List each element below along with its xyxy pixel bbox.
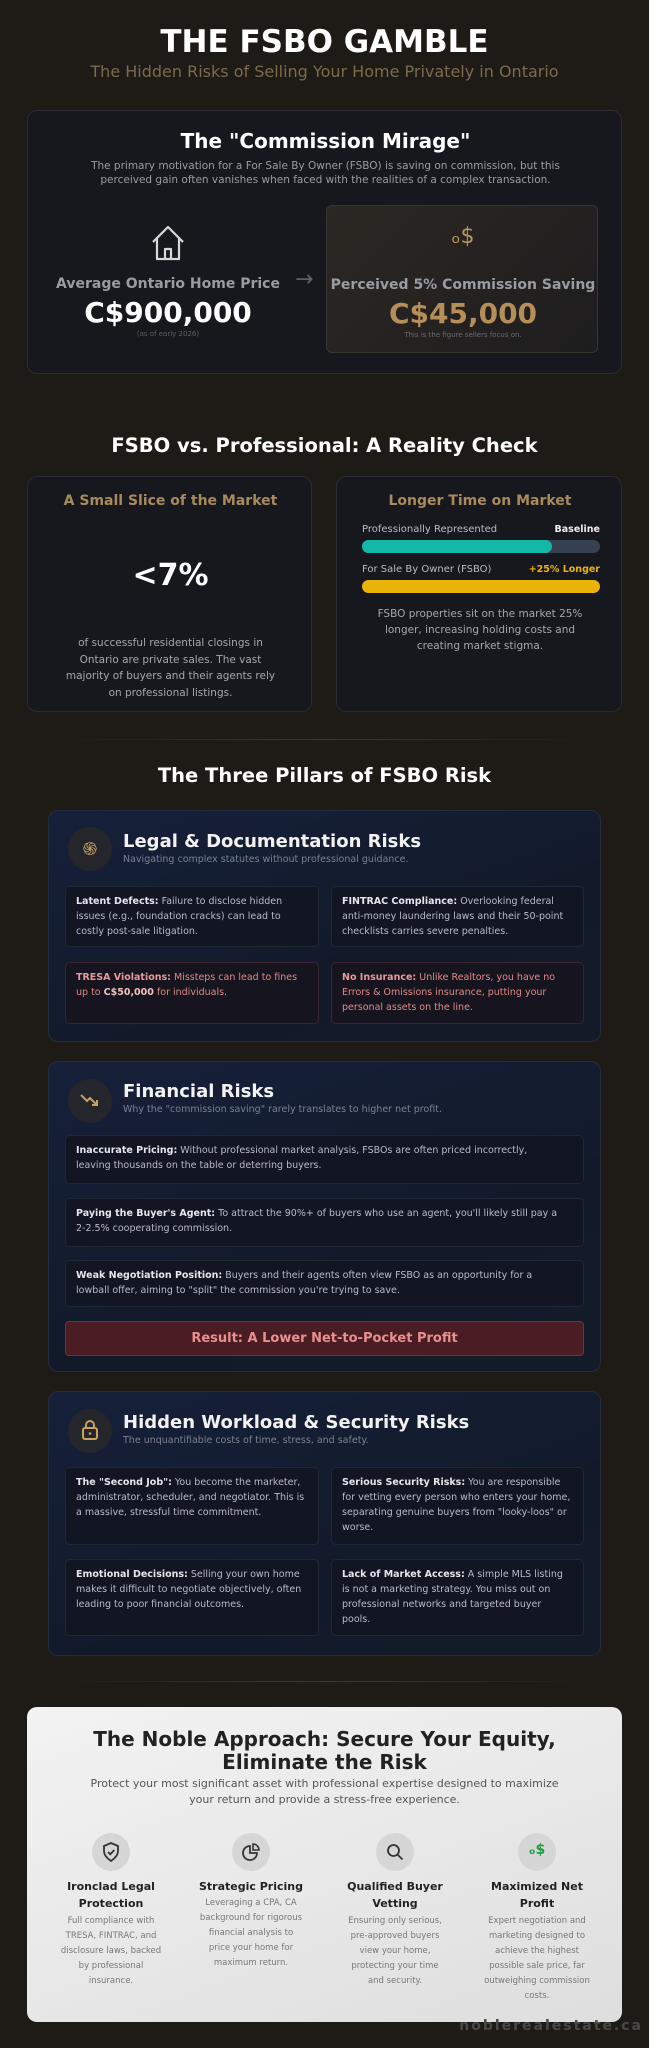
- feature: legal protection: disclosure laws, backed: [61, 1946, 161, 1956]
- feature: net profit: [484, 1833, 590, 2001]
- bar chart: +25% Longer: [529, 564, 600, 575]
- description: [91, 160, 560, 186]
- icon: coins: ₒ$: [451, 224, 475, 249]
- title: THE FSBO GAMBLE: [160, 24, 489, 60]
- panel: time on market: FSBO properties sit on the market 25%: [378, 608, 582, 620]
- box: buyer's agent: Paying the Buyer's Agent: To attract the 90%+ of buyers who use an agent, you'll likely still pay a: [76, 1208, 557, 1219]
- feature: legal protection: Ironclad Legal: [67, 1880, 155, 1893]
- stat: average price: [56, 226, 280, 338]
- box: security: [331, 1467, 584, 1545]
- box: buyer's agent: [65, 1198, 584, 1247]
- feature: buyer vetting: and security.: [368, 1976, 422, 1986]
- panel: financial risks: [48, 1061, 601, 1372]
- subtitle: The Hidden Risks of Selling Your Home Privately in Ontario: [90, 62, 559, 81]
- feature: buyer vetting: protecting your time: [351, 1961, 439, 1971]
- box: market access: pools.: [342, 1614, 370, 1625]
- feature: pricing: maximum return.: [214, 1958, 288, 1968]
- panel: small slice: A Small Slice of the Market: [64, 493, 277, 509]
- box: second job: a massive, stressful time commitment.: [76, 1507, 261, 1518]
- feature: net profit: costs.: [525, 1991, 549, 2001]
- bar chart: Professionally Represented: [362, 524, 497, 535]
- box: pricing: [65, 1135, 584, 1184]
- stat: commission saving: C$45,000: [389, 297, 537, 330]
- callout: result: [65, 1321, 584, 1356]
- box: TRESA: up to C$50,000 for individuals.: [76, 987, 227, 998]
- panel: time on market: longer, increasing holding costs and: [385, 624, 575, 636]
- box: pricing: leaving thousands on the table or deterring buyers.: [76, 1160, 321, 1171]
- stat: average price: C$900,000: [84, 296, 252, 329]
- stat: average price: (as of early 2026): [137, 330, 199, 338]
- icon: trend down: [68, 1079, 112, 1123]
- heading: Legal & Documentation Risks: [123, 831, 421, 852]
- panel: financial risks: Financial Risks: [123, 1081, 274, 1102]
- box: insurance: personal assets on the line.: [342, 1002, 473, 1013]
- panel: workload risks: [48, 1391, 601, 1656]
- feature: net profit: possible sale price, far: [489, 1961, 585, 1971]
- box: FINTRAC: checklists carries severe penalties.: [342, 926, 508, 937]
- feature: buyer vetting: [347, 1833, 443, 1986]
- box: buyer's agent: 2-2.5% cooperating commission.: [76, 1223, 232, 1234]
- panel: small slice: majority of buyers and their agents rely: [66, 670, 275, 682]
- box: second job: administrator, scheduler, and negotiator. This is: [76, 1492, 304, 1503]
- panel: small slice: Ontario are private sales. The vast: [80, 654, 261, 666]
- feature: buyer vetting: Vetting: [372, 1897, 418, 1910]
- box: latent defects: issues (e.g., foundation cracks) can lead to: [76, 911, 281, 922]
- heading: [93, 1727, 556, 1774]
- box: TRESA: TRESA Violations: Missteps can lead to fines: [76, 972, 297, 983]
- box: negotiation: lowball offer, aiming to "split" the commission you're trying to save.: [76, 1285, 400, 1296]
- panel: financial risks: Why the "commission saving" rarely translates to higher net profit.: [123, 1104, 442, 1115]
- description: [90, 1777, 558, 1806]
- feature: legal protection: by professional: [79, 1961, 143, 1971]
- panel: workload risks: The unquantifiable costs of time, stress, and safety.: [123, 1435, 369, 1446]
- stat: average price: Average Ontario Home Price: [56, 276, 280, 292]
- feature: buyer vetting: view your home,: [360, 1946, 430, 1956]
- box: second job: [65, 1467, 319, 1545]
- panel: time on market: Longer Time on Market: [388, 493, 571, 509]
- box: emotional: Emotional Decisions: Selling your own home: [76, 1569, 300, 1580]
- box: insurance: [331, 962, 584, 1024]
- heading: Eliminate the Risk: [222, 1750, 427, 1774]
- feature: legal protection: TRESA, FINTRAC, and: [66, 1931, 156, 1941]
- panel: small slice: [27, 476, 312, 712]
- box: emotional: [65, 1559, 319, 1636]
- bar chart: [362, 524, 600, 593]
- feature: legal protection: insurance.: [89, 1976, 133, 1986]
- feature: net profit: Expert negotiation and: [488, 1916, 586, 1926]
- box: security: separating genuine buyers from "looky-loos" or: [342, 1507, 567, 1518]
- icon: lock: [68, 1409, 112, 1453]
- panel: legal risks: [48, 810, 601, 1042]
- box: emotional: leading to poor financial outcomes.: [76, 1599, 244, 1610]
- arrow: →: [295, 267, 313, 292]
- bar chart: For Sale By Owner (FSBO): [362, 564, 491, 575]
- panel: time on market: [336, 476, 622, 712]
- icon: legal: [68, 827, 112, 871]
- box: latent defects: costly post-sale litigation.: [76, 926, 198, 937]
- panel: legal risks: Navigating complex statutes without professional guidance.: [123, 854, 409, 865]
- box: negotiation: Weak Negotiation Position: Buyers and their agents often view FSBO as an opportunity for a: [76, 1270, 532, 1281]
- box: market access: Lack of Market Access: A simple MLS listing: [342, 1569, 563, 1580]
- section heading: reality check: FSBO vs. Professional: A Reality Check: [111, 434, 538, 457]
- panel: workload risks: Hidden Workload & Security Risks: [123, 1412, 469, 1433]
- panel: small slice: of successful residential closings in: [78, 637, 263, 649]
- panel: noble approach: [27, 1707, 622, 2022]
- box: security: Serious Security Risks: You are responsible: [342, 1477, 560, 1488]
- feature: buyer vetting: Ensuring only serious,: [348, 1916, 442, 1926]
- panel: time on market: creating market stigma.: [417, 640, 543, 652]
- box: security: for vetting every person who enters your home,: [342, 1492, 570, 1503]
- feature: net profit: outweighing commission: [484, 1976, 590, 1986]
- box: emotional: makes it difficult to negotiate objectively, often: [76, 1584, 301, 1595]
- icon: house: [152, 226, 184, 260]
- stat: <7%: <7%: [132, 558, 209, 593]
- panel: small slice: on professional listings.: [109, 686, 232, 698]
- description: Protect your most significant asset with professional expertise designed to maximize: [90, 1777, 558, 1790]
- feature: net profit: ₒ$: [529, 1842, 545, 1858]
- footer: website: noblerealestate.ca: [459, 2018, 643, 2034]
- box: second job: The "Second Job": You become the marketer,: [76, 1477, 300, 1488]
- box: insurance: No Insurance: Unlike Realtors, you have no: [342, 972, 555, 983]
- box: market access: is not a marketing strategy. You miss out on: [342, 1584, 550, 1595]
- box: FINTRAC: anti-money laundering laws and their 50-point: [342, 911, 563, 922]
- box: latent defects: [65, 886, 319, 947]
- feature: pricing: financial analysis to: [209, 1928, 293, 1938]
- box: insurance: Errors & Omissions insurance, putting your: [342, 987, 546, 998]
- description: The primary motivation for a For Sale By Owner (FSBO) is saving on commission, but this: [91, 160, 560, 172]
- feature: net profit: marketing designed to: [489, 1931, 585, 1941]
- feature: buyer vetting: pre-approved buyers: [351, 1931, 439, 1941]
- description: perceived gain often vanishes when faced with the realities of a complex transaction.: [100, 174, 551, 186]
- box: market access: [331, 1559, 584, 1636]
- stat: commission saving: [326, 205, 598, 353]
- box: TRESA: [65, 962, 319, 1024]
- feature: legal protection: Full compliance with: [68, 1916, 154, 1926]
- feature: net profit: achieve the highest: [495, 1946, 579, 1956]
- feature: legal protection: Protection: [79, 1897, 143, 1910]
- feature: pricing: [199, 1833, 303, 1968]
- feature: buyer vetting: Qualified Buyer: [347, 1880, 443, 1893]
- heading: The "Commission Mirage": [181, 129, 470, 153]
- description: your return and provide a stress-free experience.: [189, 1793, 460, 1806]
- heading: The Noble Approach: Secure Your Equity,: [93, 1727, 556, 1751]
- box: security: worse.: [342, 1522, 373, 1533]
- section heading: three pillars: The Three Pillars of FSBO Risk: [158, 764, 491, 787]
- box: FINTRAC: FINTRAC Compliance: Overlooking federal: [342, 896, 554, 907]
- feature: pricing: price your home for: [209, 1943, 293, 1953]
- stat: commission saving: Perceived 5% Commission Saving: [331, 277, 595, 293]
- box: market access: professional networks and targeted buyer: [342, 1599, 541, 1610]
- stat: commission saving: This is the figure sellers focus on.: [404, 331, 522, 339]
- feature: net profit: Maximized Net: [491, 1880, 583, 1893]
- feature: legal protection: [61, 1833, 161, 1986]
- box: FINTRAC: [331, 886, 584, 947]
- callout: result: Result: A Lower Net-to-Pocket Profit: [191, 1331, 458, 1346]
- feature: pricing: background for rigorous: [200, 1913, 302, 1923]
- box: latent defects: Latent Defects: Failure to disclose hidden: [76, 896, 282, 907]
- feature: net profit: Profit: [520, 1897, 554, 1910]
- feature: pricing: Leveraging a CPA, CA: [205, 1898, 297, 1908]
- icon: legal: ֍: [83, 839, 97, 860]
- bar chart: Baseline: [555, 524, 600, 535]
- box: pricing: Inaccurate Pricing: Without professional market analysis, FSBOs are often priced incorrectly,: [76, 1145, 527, 1156]
- box: negotiation: [65, 1260, 584, 1307]
- panel: commission mirage: [27, 110, 622, 374]
- feature: pricing: Strategic Pricing: [199, 1880, 303, 1893]
